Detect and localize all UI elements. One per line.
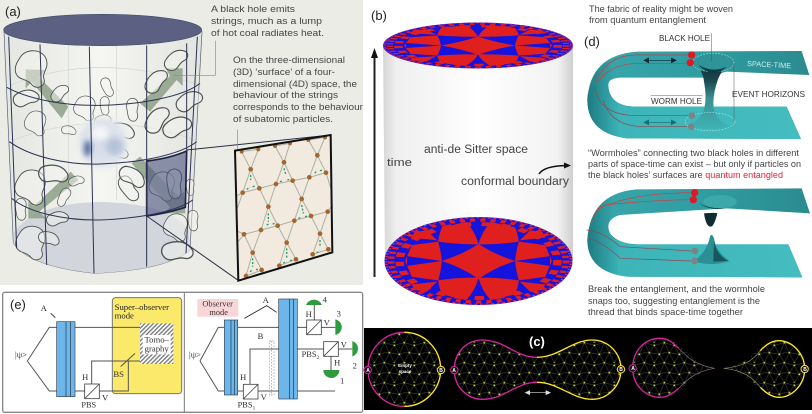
right labels: 3 <box>337 309 341 319</box>
intro text <box>589 4 733 26</box>
top tiled disc <box>383 22 573 68</box>
panel b: anti-de Sitter cylinder <box>371 8 573 305</box>
highlighted patch <box>147 151 187 216</box>
left circuit lines <box>27 327 140 391</box>
label e: (e) <box>10 297 26 312</box>
label black hole: BLACK HOLE <box>659 33 710 43</box>
time arrow <box>371 48 378 277</box>
endpoint letters: A <box>366 368 370 374</box>
black hole sphere <box>72 112 133 173</box>
bottom tiled disc <box>384 217 572 305</box>
endpoint letters: B <box>619 367 623 373</box>
right labels: PBS <box>302 350 316 359</box>
right labels: PBS <box>238 401 252 410</box>
middle text: “Wormholes” connecting two black holes in different <box>588 148 799 159</box>
closing text: snaps too, suggesting entanglement is the <box>588 296 760 307</box>
left labels <box>15 303 124 410</box>
empty space label <box>398 363 412 374</box>
caption: three-dimensional surface: of subatomic particles. <box>233 114 333 125</box>
observer mode tag: Observer <box>202 300 233 309</box>
caption: three-dimensional surface <box>233 55 364 125</box>
closing text: Break the entanglement, and the wormhole <box>588 284 765 295</box>
label conformal boundary: conformal boundary <box>461 176 569 188</box>
intro text: The fabric of reality might be woven <box>589 4 733 15</box>
right labels: 1 <box>340 375 344 385</box>
cylinder rings and verticals <box>7 37 200 273</box>
endpoint markers <box>364 365 808 374</box>
connected wormhole diagram <box>587 33 809 139</box>
throat <box>685 60 735 130</box>
label event horizons: EVENT HORIZONS <box>732 89 805 99</box>
caption: three-dimensional surface: dimensional (4D) space, the <box>233 79 357 90</box>
endpoint letters: B <box>803 367 807 373</box>
separated teardrop right <box>724 341 805 397</box>
label d: (d) <box>584 34 600 49</box>
middle text <box>588 148 801 181</box>
caption: black hole emits: of hot coal radiates heat. <box>211 28 324 39</box>
right circuit lines <box>200 305 352 391</box>
label worm hole: WORM HOLE <box>651 96 702 106</box>
endpoint letters: B <box>439 368 443 374</box>
closing text <box>588 284 765 318</box>
double arrows <box>644 58 676 63</box>
label c: (c) <box>529 334 545 349</box>
teal sheets <box>587 51 809 139</box>
left labels: |ψ> <box>15 350 27 360</box>
right labels: V <box>261 392 268 402</box>
right labels: B <box>258 331 264 341</box>
left labels: A <box>41 303 48 313</box>
PBS cubes right <box>243 320 338 399</box>
left labels: PBS <box>81 401 97 410</box>
arrows <box>26 68 185 218</box>
panel e: optical diagrams <box>3 292 363 412</box>
back grid <box>11 15 199 200</box>
blue blocks right <box>224 320 238 395</box>
caption: three-dimensional surface: On the three-dimensional <box>233 55 345 66</box>
inset lattice <box>235 135 332 281</box>
callout lines <box>147 135 331 281</box>
right labels: V <box>341 340 348 350</box>
tomography box <box>140 323 173 364</box>
right labels <box>189 294 357 412</box>
endpoint letters: A <box>452 368 456 374</box>
right labels: V <box>324 318 331 328</box>
red strings <box>595 55 688 83</box>
right labels: 1 <box>252 406 255 412</box>
particles <box>691 189 698 196</box>
particles <box>688 51 695 59</box>
middle text: the black holes’ surfaces are quantum entangled <box>588 170 783 181</box>
left labels: H <box>82 372 88 382</box>
PBS cube <box>85 384 99 399</box>
panel c: spacetime network <box>364 328 812 410</box>
super-observer label: Super–observer <box>115 302 169 312</box>
super-observer box <box>112 298 182 394</box>
label space-time: SPACE-TIME <box>747 59 791 70</box>
strings <box>13 47 205 265</box>
caption: black hole emits: A black hole emits <box>211 4 295 15</box>
broken wormhole diagram <box>587 188 810 277</box>
cylinder body <box>383 45 573 260</box>
panel a: black hole cylinder <box>0 0 364 285</box>
right labels: H <box>240 372 246 382</box>
caption: three-dimensional surface: corresponds to the behaviour <box>233 102 364 113</box>
label anti-de Sitter space: anti-de Sitter space <box>424 144 528 156</box>
detectors <box>306 300 358 378</box>
right labels: 2 <box>316 355 319 361</box>
observer mode tag: mode <box>209 308 228 317</box>
caption: black hole emits <box>211 4 324 39</box>
stretch arrow <box>525 391 550 395</box>
observer mode tag <box>197 299 238 317</box>
label a: (a) <box>5 4 21 19</box>
super-observer label: mode <box>115 311 134 321</box>
closing text: thread that binds space-time together <box>588 307 743 318</box>
frame <box>3 292 363 412</box>
right labels: |ψ> <box>189 350 201 360</box>
right labels: 2 <box>353 360 357 370</box>
caption: three-dimensional surface: behaviour of the strings <box>233 90 338 101</box>
black background <box>364 328 812 410</box>
top ellipse <box>4 14 202 46</box>
separated teardrop left <box>633 338 715 397</box>
empty space label: space <box>399 369 412 374</box>
caption: three-dimensional surface: (3D) ‘surface’ of a four- <box>233 67 335 78</box>
cylinder body <box>4 32 202 273</box>
broken funnel stubs <box>703 195 737 208</box>
middle text: parts of space-time can exist – but only if particles on <box>588 159 801 170</box>
endpoint letters <box>366 366 807 374</box>
caption: black hole emits: strings, much as a lump <box>211 16 322 27</box>
tomography box: Tomo– <box>144 334 170 344</box>
endpoint letters: A <box>631 366 635 372</box>
left labels: V <box>102 392 109 402</box>
super-observer label <box>115 302 169 321</box>
tomography box: graphy <box>145 344 169 354</box>
left labels: BS <box>113 369 124 379</box>
leader lines <box>711 33 734 122</box>
panel d: wormhole <box>584 4 810 318</box>
boundary arrow <box>539 162 571 174</box>
right labels: A <box>263 295 270 305</box>
label time: time <box>387 157 412 169</box>
empty space circle <box>368 332 441 406</box>
right labels: 4 <box>323 294 328 304</box>
red strings <box>593 193 690 222</box>
right labels: H <box>306 309 312 319</box>
blue block left <box>57 322 75 397</box>
dashed pass-through <box>269 341 274 395</box>
connected peanut <box>454 340 621 399</box>
cylinder floor <box>13 202 190 273</box>
empty space label: Empty <box>398 363 412 368</box>
intro text: from quantum entanglement <box>589 15 706 26</box>
teal sheets <box>587 188 810 277</box>
right labels: H <box>334 358 340 368</box>
label b: (b) <box>371 8 387 23</box>
